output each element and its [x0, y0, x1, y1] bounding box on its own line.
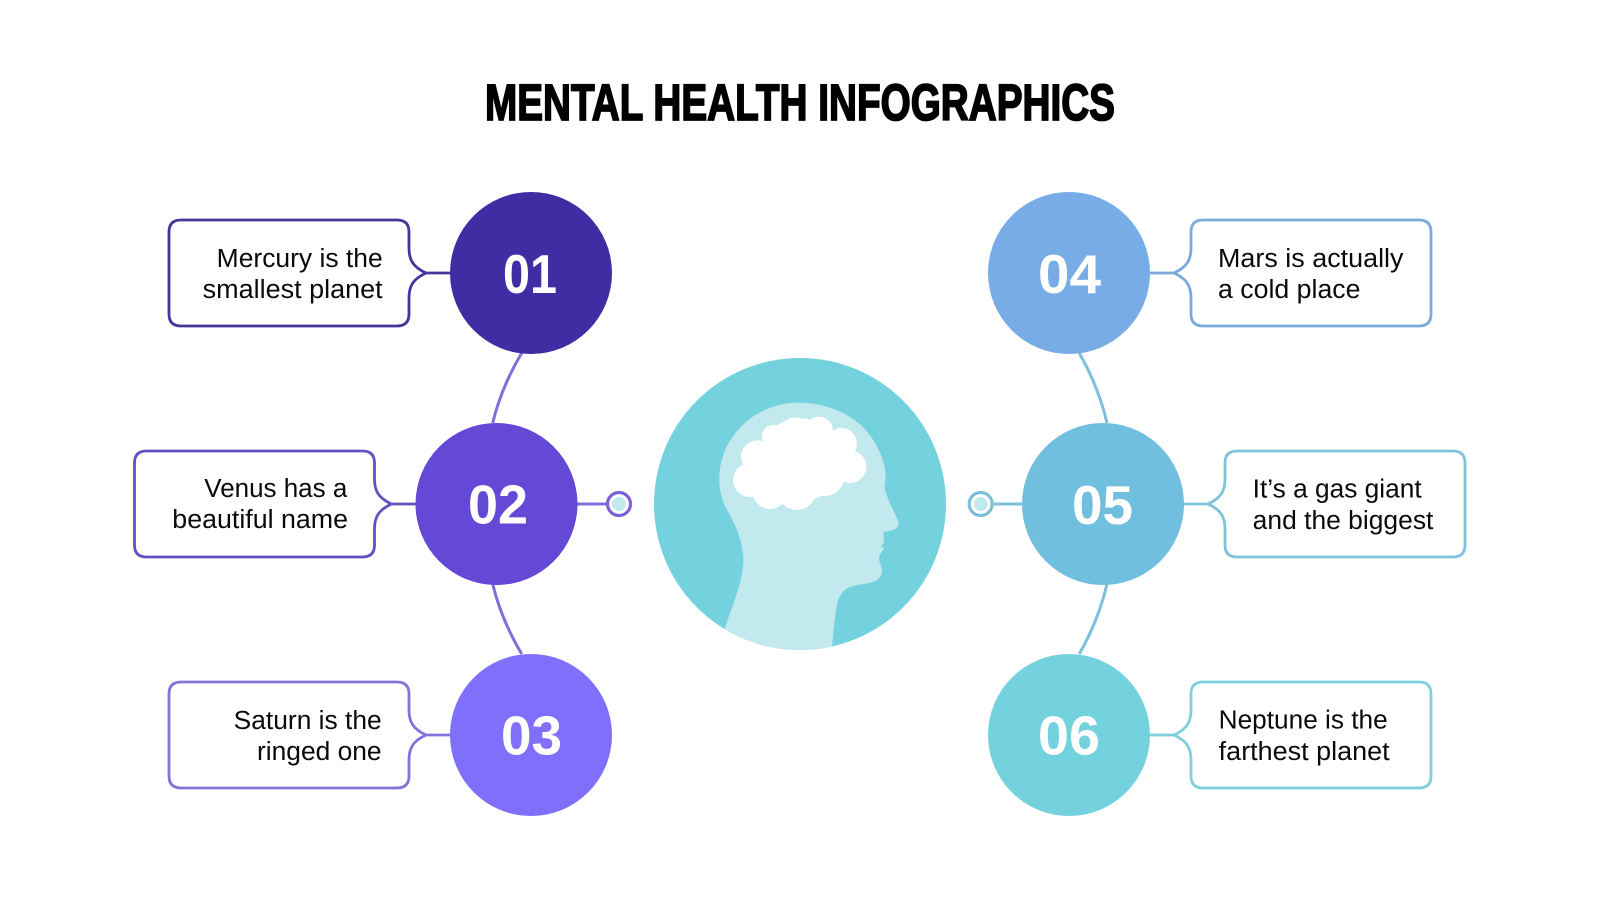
text 06: Neptune is the [1219, 706, 1388, 734]
number circle 01 [450, 192, 612, 354]
callout 05 [1182, 451, 1465, 557]
connector dot left [575, 492, 630, 516]
text 02: beautiful name [172, 506, 348, 534]
text 05: and the biggest [1253, 507, 1433, 535]
callout box 01 [169, 220, 452, 326]
central head icon [654, 358, 946, 653]
callout 01 [169, 220, 452, 326]
number circle 01: 01 [503, 243, 557, 305]
number circle 02: 02 [468, 474, 528, 536]
connector dot right [969, 492, 1025, 516]
text 03: Saturn is the [234, 707, 382, 735]
text 06: farthest planet [1219, 738, 1390, 766]
number circle 03 [450, 654, 612, 816]
text 01: smallest planet [203, 276, 383, 304]
text 04: Mars is actually [1218, 245, 1404, 273]
text 02: Venus has a [204, 475, 348, 503]
callout box 06 [1148, 682, 1431, 788]
connector: 01 to 02 [493, 353, 522, 423]
callout box 05 [1182, 451, 1465, 557]
number circle 04: 04 [1038, 243, 1101, 305]
connector: 02 to 03 [493, 584, 522, 654]
callout box 02 [134, 451, 418, 557]
callout 06 [1148, 682, 1431, 788]
text 01: Mercury is the [217, 245, 383, 273]
number circle 02 [416, 423, 578, 585]
connector: 04 to 05 [1079, 353, 1107, 423]
text 03: ringed one [257, 738, 382, 766]
number circle 06 [988, 654, 1150, 816]
title: MENTAL HEALTH INFOGRAPHICS [485, 74, 1115, 131]
number circle 05: 05 [1072, 474, 1133, 536]
number circle 05 [1022, 423, 1184, 585]
number circle 03: 03 [501, 704, 562, 766]
callout 03 [169, 682, 452, 788]
callout box 03 [169, 682, 452, 788]
callout 04 [1148, 220, 1431, 326]
callout box 04 [1148, 220, 1431, 326]
text 05: It’s a gas giant [1253, 476, 1422, 504]
icon: brain cloud [733, 417, 866, 510]
connector: 05 to 06 [1079, 584, 1107, 654]
callout 02 [134, 451, 418, 557]
number circle 06: 06 [1038, 704, 1100, 766]
number circle 04 [988, 192, 1150, 354]
text 04: a cold place [1218, 276, 1360, 304]
